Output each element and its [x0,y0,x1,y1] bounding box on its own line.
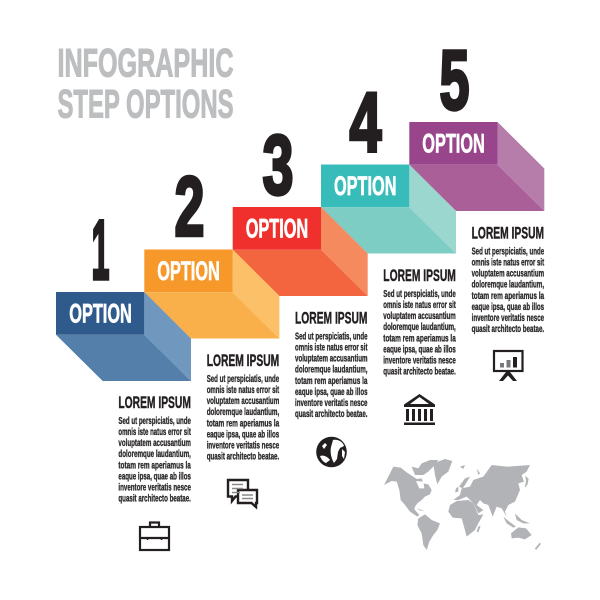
text block: step 5 [472,224,544,335]
icon: chat bubbles [228,480,257,507]
text block: step 1: inventore veritatis nesce [118,482,191,494]
text block: step 2: LOREM IPSUM [207,351,279,370]
text block: step 4: voluptatem accusantium [383,310,456,322]
text block: step 3: omnis iste natus error sit [295,342,368,354]
step 3 block [233,207,368,296]
text block: step 1: omnis iste natus error sit [118,426,191,438]
text: 1 [92,203,110,297]
text block: step 5: voluptatem accusantium [472,268,544,280]
text block: step 2: Sed ut perspiciatis, unde [207,373,279,385]
text block: step 5: LOREM IPSUM [472,224,544,242]
text block: step 3: quasit architecto beatae. [295,408,368,420]
text block: step 2: omnis iste natus error sit [207,384,279,396]
number 2: 2 [174,160,204,254]
text block: step 1: doloremque laudantium, [118,448,191,460]
world map [384,459,541,550]
text block: step 3: inventore veritatis nesce [295,397,368,409]
text block: step 4: inventore veritatis nesce [383,354,456,366]
text block: step 3 [295,308,368,420]
text block: step 1: voluptatem accusantium [118,437,191,449]
text block: step 5: quasit architecto beatae. [472,323,544,335]
title [58,42,234,126]
text block: step 5: inventore veritatis nesce [472,312,544,324]
title: STEP OPTIONS [58,82,234,126]
step 1 block [56,292,191,381]
text block: step 5: doloremque laudantium, [472,279,544,291]
step 4 block: OPTION [334,171,396,201]
text block: step 1: quasit architecto beatae. [118,493,191,505]
text block: step 1: Sed ut perspiciatis, unde [118,415,191,427]
text block: step 5: totam rem aperiamus la [472,290,544,302]
text block: step 2: inventore veritatis nesce [207,440,279,452]
icon: globe [316,437,347,467]
text block: step 4: Sed ut perspiciatis, unde [383,288,456,300]
text block: step 5: Sed ut perspiciatis, unde [472,245,544,257]
step 4 block [321,164,456,254]
step 2 block: OPTION [157,256,220,286]
text block: step 3: voluptatem accusantium [295,353,368,365]
number 5: 5 [440,33,470,127]
title: INFOGRAPHIC [58,42,234,86]
text block: step 2 [207,351,279,463]
text block: step 3: eaque ipsa, quae ab illos [295,386,368,398]
step 5 block: OPTION [422,129,485,159]
step 2 block [144,250,279,338]
step 5 block [409,122,544,211]
text block: step 4: LOREM IPSUM [383,266,456,285]
text block: step 2: eaque ipsa, quae ab illos [207,428,279,440]
text block: step 3: totam rem aperiamus la [295,375,368,387]
icon: bank building [404,394,435,425]
text block: step 3: LOREM IPSUM [295,308,368,328]
text block: step 1 [118,393,191,505]
text block: step 2: doloremque laudantium, [207,406,279,418]
text block: step 1: totam rem aperiamus la [118,459,191,471]
step 3 block: OPTION [246,214,308,244]
text block: step 2: voluptatem accusantium [207,395,279,407]
icon: presentation board [494,351,522,381]
text block: step 4: doloremque laudantium, [383,321,456,333]
text block: step 4: eaque ipsa, quae ab illos [383,343,456,355]
text block: step 1: LOREM IPSUM [118,393,191,412]
text block: step 4: omnis iste natus error sit [383,299,456,311]
text block: step 3: Sed ut perspiciatis, unde [295,330,368,342]
number 3: 3 [262,118,294,212]
text block: step 3: doloremque laudantium, [295,364,368,376]
number 4: 4 [350,76,382,170]
text block: step 2: quasit architecto beatae. [207,451,279,463]
text block: step 4: totam rem aperiamus la [383,332,456,344]
step 1 block: OPTION [69,299,132,329]
text block: step 5: omnis iste natus error sit [472,256,544,268]
text block: step 1: eaque ipsa, quae ab illos [118,470,191,482]
text block: step 5: eaque ipsa, quae ab illos [472,301,544,313]
icon: briefcase [140,522,169,550]
text block: step 2: totam rem aperiamus la [207,417,279,429]
text block: step 4 [383,266,456,378]
text block: step 4: quasit architecto beatae. [383,366,456,378]
